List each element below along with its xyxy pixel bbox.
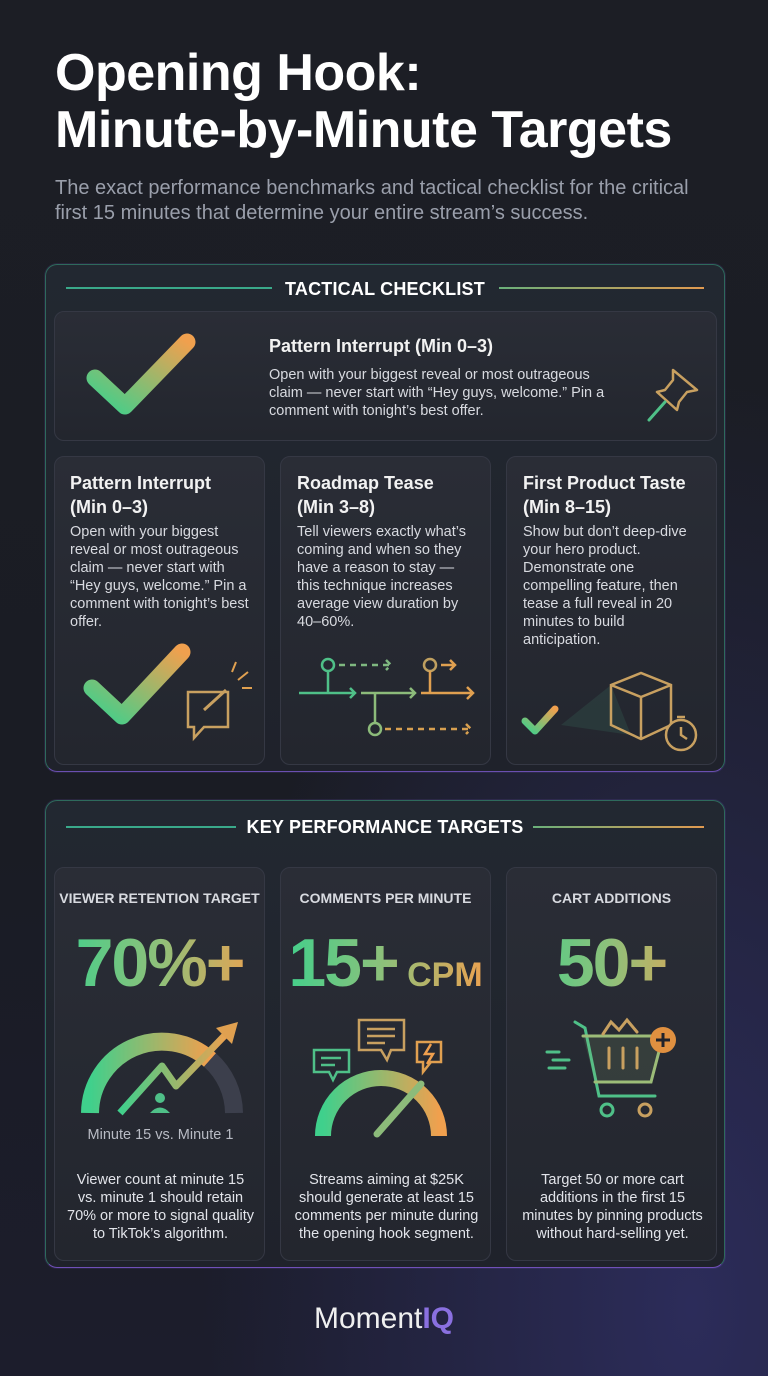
card: viewer retention: VIEWER RETENTION TARGET xyxy=(59,890,260,906)
icon: check and chat pin xyxy=(84,644,252,742)
text: featured: Pattern Interrupt (Min 0–3) xyxy=(269,336,493,356)
card: cart additions xyxy=(506,867,717,1261)
icon: gauge with arrow xyxy=(81,1022,243,1116)
card: cart additions: Target 50 or more cart additions in the first 15 minutes by pinning products without hard-selling yet. xyxy=(522,1172,703,1242)
stat: 70%+: 70%+ xyxy=(76,925,243,1001)
icon: box and timer xyxy=(522,672,698,752)
title: Minute-by-Minute Targets xyxy=(55,101,672,159)
card: comments per minute: COMMENTS PER MINUTE xyxy=(300,890,471,906)
title xyxy=(55,44,672,159)
card: roadmap tease: (Min 3–8) xyxy=(297,497,375,517)
card: first product taste xyxy=(506,456,717,765)
icon: chat bubbles and speedometer xyxy=(312,1018,447,1138)
card: comments per minute: Streams aiming at $25K should generate at least 15 comments per minute during the opening hook segment. xyxy=(295,1172,478,1242)
card: pattern interrupt: (Min 0–3) xyxy=(70,497,148,517)
heading: key performance targets: KEY PERFORMANCE TARGETS xyxy=(247,817,523,837)
stat: 50+: 50+ xyxy=(557,925,666,1001)
panel: tactical checklist xyxy=(45,264,725,772)
card: viewer retention: Viewer count at minute 15 vs. minute 1 should retain 70% or more to signal quality to TikTok’s algorithm. xyxy=(67,1172,254,1242)
card: viewer retention: Minute 15 vs. Minute 1 xyxy=(88,1127,233,1143)
logo: MomentIQ: MomentIQ xyxy=(314,1302,454,1335)
card: featured pattern interrupt xyxy=(54,311,717,441)
card: roadmap tease: Tell viewers exactly what’s coming and when so they have a reason to stay — this technique increases average view duration by 40–60%. xyxy=(297,524,466,630)
card: pattern interrupt: Open with your biggest reveal or most outrageous claim — never start with “Hey guys, welcome.” Pin a comment with tonight’s best offer. xyxy=(70,524,249,630)
card: cart additions: CART ADDITIONS xyxy=(552,890,671,906)
icon: roadmap arrows xyxy=(299,658,475,736)
card: first product taste: First Product Taste (Min 8–15) xyxy=(523,473,686,517)
card: pattern interrupt: Pattern Interrupt xyxy=(70,473,211,493)
text: featured: Open with your biggest reveal or most outrageous claim — never start with “Hey guys, welcome.” Pin a comment with tonight’s best offer. xyxy=(269,367,604,419)
card: viewer retention xyxy=(54,867,265,1261)
stat: 15+ CPM: 15+ CPM xyxy=(288,925,483,1001)
text: featured xyxy=(269,336,604,419)
card: pattern interrupt xyxy=(54,456,265,765)
stat: 50+ xyxy=(507,924,716,1002)
heading: tactical checklist: TACTICAL CHECKLIST xyxy=(285,279,485,299)
card: roadmap tease xyxy=(280,456,491,765)
subtitle: The exact performance benchmarks and tactical checklist for the critical first 15 minutes that determine your entire stream’s success. xyxy=(55,177,689,224)
card: comments per minute xyxy=(280,867,491,1261)
title: Opening Hook: xyxy=(55,44,421,102)
icon: big check xyxy=(86,334,196,414)
icon: pushpin xyxy=(647,368,698,422)
panel: key performance targets xyxy=(45,800,725,1268)
card: first product taste: Show but don’t deep-dive your hero product. Demonstrate one compelling feature, then tease a full reveal in 20 minutes to build anticipation. xyxy=(523,524,687,648)
icon: cart with plus xyxy=(546,1018,676,1118)
card: roadmap tease: Roadmap Tease xyxy=(297,473,434,493)
